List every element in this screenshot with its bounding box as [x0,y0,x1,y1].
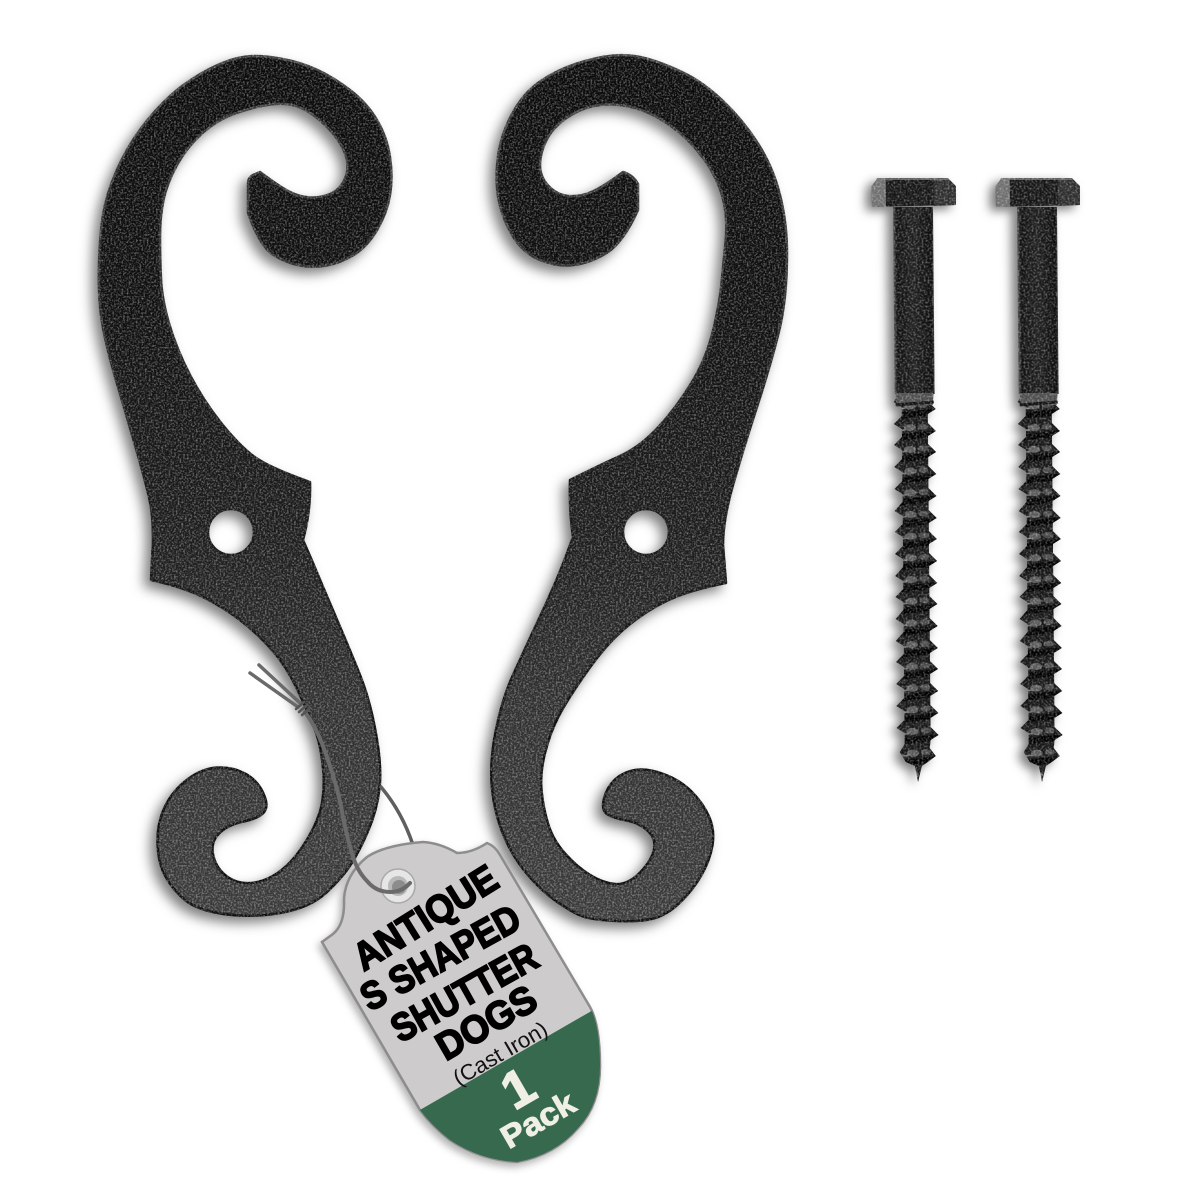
tag green band [420,1010,600,1162]
wire twist coil [296,702,310,715]
tag heading line 1: ANTIQUE [346,857,506,979]
tag heading line 4: DOGS [429,977,545,1069]
wire tie [250,665,410,892]
right lag screw [996,178,1085,782]
wire twisted end one [259,665,300,703]
left lag screw [872,178,961,782]
eyelet [381,869,415,903]
wire strand behind tag [381,787,413,845]
tag heading line 3: SHUTTER [384,935,546,1051]
wire loop through eyelet [305,712,410,892]
right S-shaped shutter dog [491,55,787,921]
pack count: 1 [491,1057,546,1121]
tag subtitle: (Cast Iron) [449,1016,552,1091]
wire twisted end two [250,673,298,707]
left S-shaped shutter dog [99,56,392,916]
tag body [322,842,600,1162]
tag heading line 2: S SHAPED [353,897,528,1020]
pack label: Pack [494,1084,582,1156]
product tag [322,842,620,1180]
